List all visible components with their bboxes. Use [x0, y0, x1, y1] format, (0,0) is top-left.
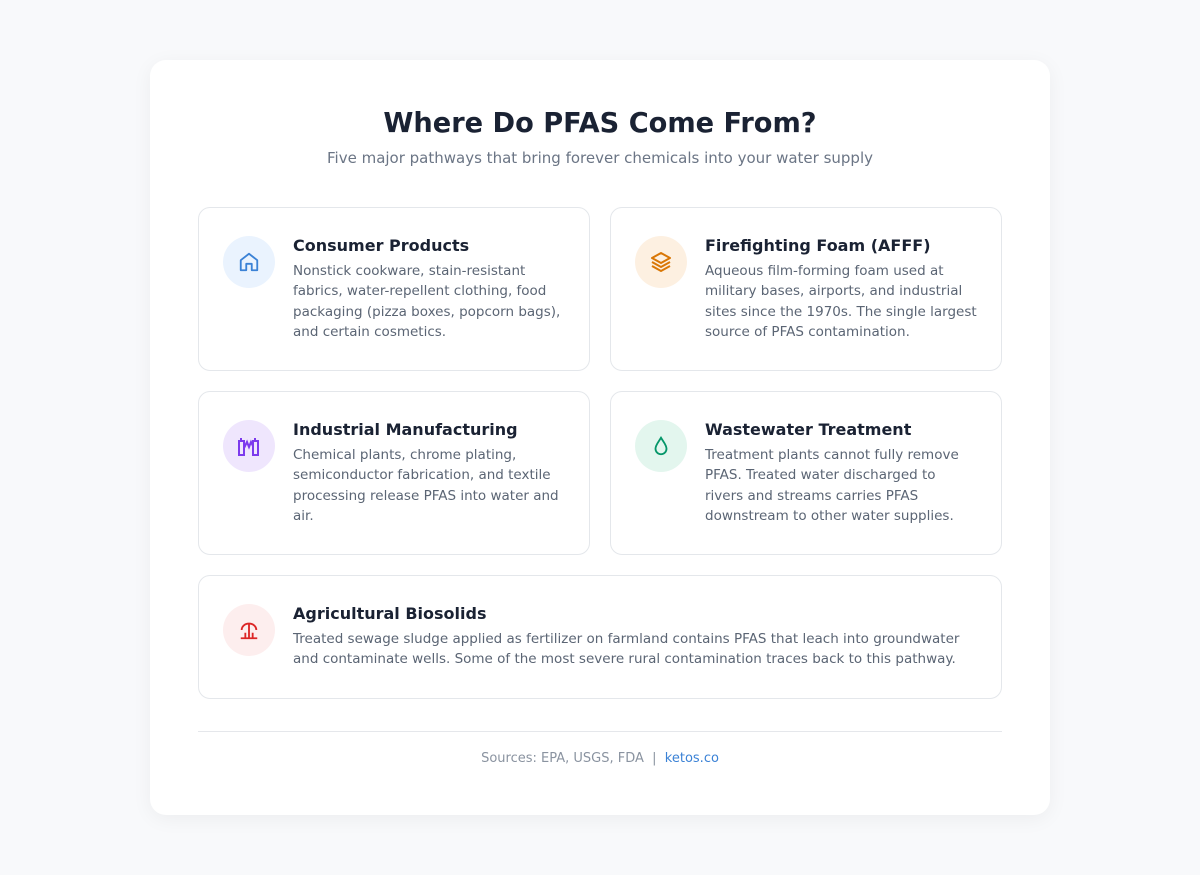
main card — [150, 60, 1050, 815]
icon: layers — [635, 236, 687, 288]
panel: industrial manufacturing — [198, 391, 590, 555]
subtitle: Five major pathways that bring forever chemicals into your water supply — [327, 149, 873, 167]
text: wastewater: Wastewater Treatment — [705, 420, 911, 439]
text: industrial: Chemical plants, chrome plating, semiconductor fabrication, and textile processing release PFAS into water and air. — [293, 447, 559, 524]
panel: firefighting foam — [610, 207, 1002, 371]
text: firefighting foam: Firefighting Foam (AFFF) — [705, 236, 931, 255]
panel: agricultural biosolids — [198, 575, 1002, 699]
panel: consumer products — [198, 207, 590, 371]
text: wastewater: Treatment plants cannot fully remove PFAS. Treated water discharged to rivers and streams carries PFAS downstream to other water supplies. — [705, 447, 959, 524]
text: biosolids: Agricultural Biosolids — [293, 604, 486, 623]
text: biosolids — [292, 604, 960, 667]
text: biosolids: Treated sewage sludge applied as fertilizer on farmland contains PFAS that leach into groundwater and contaminate wells. Some of the most severe rural contamination traces back to this pathway. — [293, 631, 959, 667]
icon: sprout — [223, 604, 275, 656]
text: consumer products: Consumer Products — [293, 236, 469, 255]
text: consumer products: Nonstick cookware, stain-resistant fabrics, water-repellent clothing, food packaging (pizza boxes, popcorn bags), and certain cosmetics. — [293, 263, 560, 340]
icon: factory — [223, 420, 275, 472]
icon: house — [223, 236, 275, 288]
title: Where Do PFAS Come From? — [383, 108, 817, 139]
icon: drop — [635, 420, 687, 472]
text: firefighting foam: Aqueous film-forming foam used at military bases, airports, and industrial sites since the 1970s. The single largest source of PFAS contamination. — [705, 263, 977, 340]
text: industrial: Industrial Manufacturing — [293, 420, 518, 439]
footer sources: Sources: EPA, USGS, FDA | ketos.co — [481, 751, 719, 766]
panel: wastewater — [610, 391, 1002, 555]
